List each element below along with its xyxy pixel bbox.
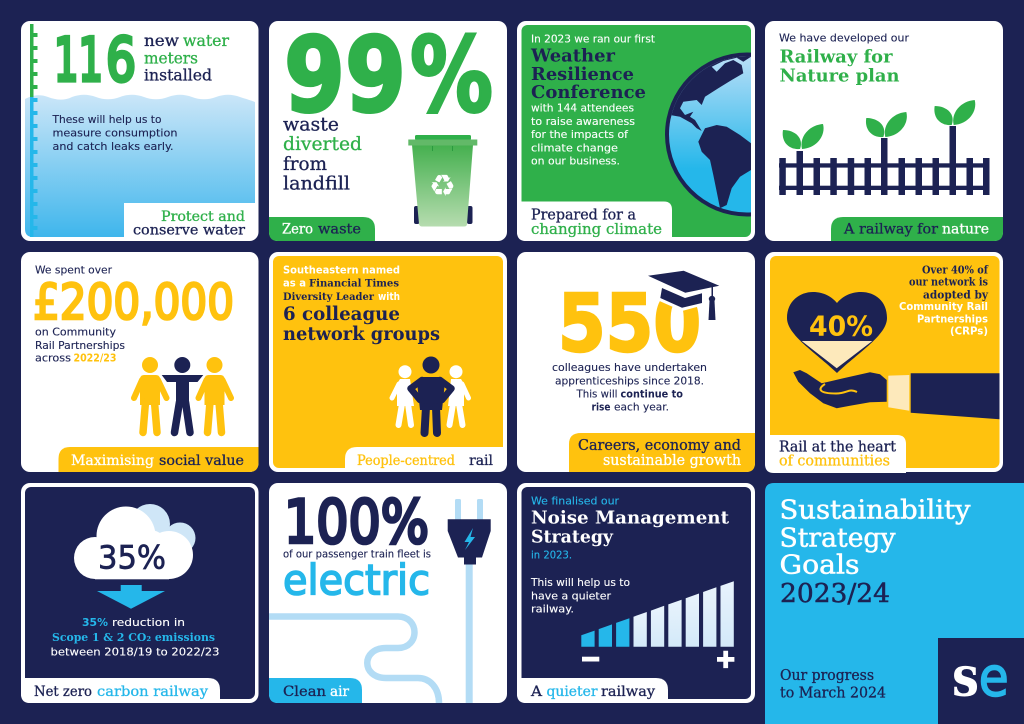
panel: water meters <box>21 21 258 241</box>
diversity leader text <box>283 263 400 303</box>
heading: railway for nature plan: Nature plan <box>780 66 900 87</box>
heading: railway for nature plan: Railway for <box>780 46 893 67</box>
icon: globe <box>665 52 751 216</box>
waste caption <box>283 115 362 194</box>
diversity leader text: with <box>378 290 400 303</box>
heading: weather resilience conference <box>530 46 646 103</box>
word: electric: electric <box>283 555 430 604</box>
label tab: zero waste: Zero <box>282 222 313 238</box>
subtitle <box>780 668 886 702</box>
label: protect and conserve water <box>133 209 245 238</box>
reduction text: reduction in <box>112 616 185 629</box>
heading: noise management strategy <box>531 507 730 548</box>
adoption text: Over 40% of <box>922 263 989 276</box>
water area <box>25 95 255 237</box>
heading: railway for nature plan <box>780 46 900 87</box>
adoption text: (CRPs) <box>950 324 988 337</box>
stat caption: installed <box>144 66 212 84</box>
label tab: a railway for nature: nature <box>942 222 989 238</box>
body text: This will help us to <box>530 576 630 589</box>
body text: continue to <box>620 387 683 400</box>
title: Goals <box>780 551 860 581</box>
panel: community rail spend <box>21 252 258 472</box>
label tab: zero waste: waste <box>318 222 361 238</box>
label: protect and conserve water: conserve water <box>133 222 245 238</box>
intro text: We finalised our <box>531 494 619 507</box>
panel: people-centred rail <box>269 252 507 472</box>
cloud stat: 35%: 35% <box>98 539 166 577</box>
label tab: a railway for nature: A railway for <box>843 222 938 238</box>
stat caption: water <box>183 32 230 50</box>
label tab: net zero carbon railway: Net zero <box>34 684 92 700</box>
subtitle: Our progress <box>780 668 874 684</box>
diversity leader text: Financial Times <box>309 278 399 290</box>
stat: 100%: 100% <box>284 488 429 558</box>
label tab: careers, economy and sustainable growth: sustainable growth <box>603 453 741 469</box>
heading: 6 colleague network groups <box>283 303 440 345</box>
title: Strategy <box>780 524 896 554</box>
heading: weather resilience conference: Resilience <box>531 64 634 85</box>
icon: graduation cap <box>648 271 719 320</box>
body text <box>52 113 178 153</box>
subtitle: to March 2024 <box>780 686 886 702</box>
body text: apprenticeships since 2018. <box>555 374 704 387</box>
reduction text: Scope 1 & 2 CO₂ emissions <box>52 631 215 644</box>
panel: apprenticeships <box>517 252 755 472</box>
adoption text: our network is <box>909 276 988 288</box>
reduction text: 35% <box>82 616 108 629</box>
label tab: maximising social value <box>58 447 258 472</box>
label: protect and conserve water: Protect and <box>161 209 245 225</box>
panel: net zero carbon <box>21 483 258 703</box>
diversity leader text: Southeastern named <box>283 263 400 276</box>
intro text: We spent over <box>35 263 112 276</box>
panel: weather resilience <box>517 21 755 241</box>
waste caption: from <box>283 154 327 175</box>
label tab: maximising social value: Maximising <box>71 453 154 469</box>
icon: hand and sleeve <box>793 370 1000 419</box>
panel: rail at the heart of communities <box>765 252 1003 473</box>
body text <box>531 102 635 167</box>
icon: colleagues <box>392 356 468 433</box>
label tab: maximising social value: social value <box>159 453 244 469</box>
panel: zero waste <box>269 16 507 241</box>
label tab: people-centred rail: rail <box>469 453 494 469</box>
title: Sustainability <box>780 496 971 526</box>
label tab: net zero carbon railway <box>21 678 220 703</box>
fleet text: of our passenger train fleet is <box>283 549 431 561</box>
label tab: people-centred rail <box>345 447 507 472</box>
label tab: rail at the heart of communities: of communities <box>779 454 890 470</box>
body text <box>552 361 707 414</box>
icon: plug <box>448 499 491 703</box>
body text: each year. <box>614 401 669 414</box>
label tab: a quieter railway: A <box>530 684 543 700</box>
label tab: prepared for a changing climate <box>517 202 672 241</box>
chart: volume bars <box>581 581 734 668</box>
icon: fence with plants <box>779 100 990 195</box>
label tab: a quieter railway: quieter <box>546 684 598 700</box>
label tab: rail at the heart of communities: Rail at the heart <box>779 440 896 456</box>
body text: for the impacts of <box>531 128 629 141</box>
heading: 6 colleague network groups: 6 colleague <box>283 303 400 325</box>
body text: measure consumption <box>52 126 178 140</box>
stat caption <box>144 32 230 84</box>
body text: colleagues have undertaken <box>552 361 707 374</box>
body text: on Community <box>35 326 116 339</box>
body text: This will <box>576 387 618 400</box>
adoption text: Partnerships <box>917 312 988 325</box>
waste caption: landfill <box>283 173 350 194</box>
icon: heart with 40% <box>787 292 887 373</box>
logo: se: e <box>979 645 1009 708</box>
label tab: zero waste <box>269 217 375 241</box>
icon: three people <box>134 357 231 432</box>
stat caption: meters <box>144 50 198 68</box>
panel: railway for nature <box>765 21 1003 241</box>
panel: quieter railway <box>517 483 755 703</box>
logo: se <box>938 638 1024 724</box>
icon: recycling bin <box>408 135 477 226</box>
body text: with 144 attendees <box>531 102 634 115</box>
body text: railway. <box>531 603 574 616</box>
icon: recycling bin: ♻ <box>429 169 456 204</box>
heading: noise management strategy: Strategy <box>531 527 614 548</box>
title <box>780 496 971 609</box>
stat: 116: 6 <box>106 26 136 96</box>
label tab: careers, economy and sustainable growth: Careers, economy and <box>578 438 741 454</box>
heading: weather resilience conference: Conference <box>531 82 646 103</box>
year text: in 2023. <box>531 549 572 562</box>
label tab: prepared for a changing climate: Prepared for a <box>531 207 636 223</box>
waste caption: diverted <box>283 134 362 155</box>
heading: 6 colleague network groups: network groups <box>283 323 440 345</box>
body text: and catch leaks early. <box>52 140 174 153</box>
stat: 550: 550 <box>558 278 701 370</box>
label tab: a quieter railway: railway <box>601 684 655 700</box>
intro text: In 2023 we ran our first <box>531 33 656 46</box>
waste caption: waste <box>283 115 339 136</box>
body text <box>530 576 630 616</box>
body text: to raise awareness <box>531 115 635 128</box>
reduction text <box>50 616 219 658</box>
label tab: clean air: Clean <box>283 684 326 700</box>
stat: £200,000: £200,000 <box>33 274 234 331</box>
panel: title <box>765 483 1024 724</box>
body text: have a quieter <box>531 589 611 602</box>
adoption text <box>899 263 989 337</box>
diversity leader text: as a <box>283 277 306 290</box>
body text: Rail Partnerships <box>35 339 125 352</box>
stat: 99%: 99 <box>284 16 406 136</box>
label tab: rail at the heart of communities <box>765 435 906 473</box>
reduction text: between 2018/19 to 2022/23 <box>50 645 219 658</box>
title: 2023/24 <box>780 579 890 609</box>
body text <box>35 326 125 365</box>
heading: noise management strategy: Noise Management <box>531 507 730 528</box>
water level ruler <box>30 24 38 237</box>
body text: across <box>35 352 71 365</box>
heading: weather resilience conference: Weather <box>530 46 616 67</box>
panel: clean air <box>269 483 507 703</box>
intro text: We have developed our <box>779 32 909 45</box>
label tab: clean air <box>269 678 362 703</box>
icon: heart with 40%: 40% <box>809 310 873 343</box>
label tab: net zero carbon railway: carbon railway <box>97 684 208 700</box>
body text: rise <box>592 401 610 414</box>
label tab: careers, economy and sustainable growth <box>569 433 755 472</box>
icon: cloud <box>74 504 196 579</box>
label tab: a quieter railway <box>517 678 668 703</box>
icon: down arrow <box>97 585 165 609</box>
label tab: clean air: air <box>330 684 349 700</box>
adoption text: Community Rail <box>899 300 988 313</box>
body text: These will help us to <box>52 113 162 126</box>
label tab: people-centred rail: People-centred <box>357 453 455 469</box>
label tab: a railway for nature <box>831 217 1003 241</box>
label tab: prepared for a changing climate: changing climate <box>531 222 662 238</box>
adoption text: adopted by <box>923 288 989 301</box>
body text: on our business. <box>531 154 620 167</box>
stat: 116: 11 <box>54 26 103 96</box>
body text: 2022/23 <box>74 352 116 365</box>
body text: climate change <box>531 141 618 154</box>
logo: se: s <box>952 643 979 709</box>
decorative cable <box>269 616 439 703</box>
stat: 99%: % <box>410 16 493 136</box>
diversity leader text: Diversity Leader <box>283 291 374 303</box>
stat caption: new <box>144 32 180 50</box>
